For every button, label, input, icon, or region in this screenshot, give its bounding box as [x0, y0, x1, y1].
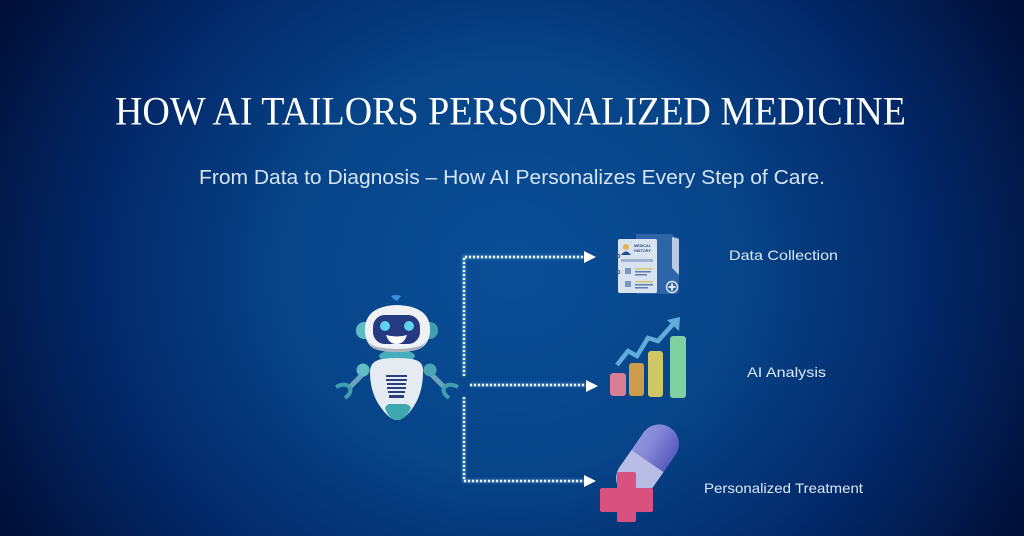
bar yellow: [648, 351, 663, 397]
icon: robot: [336, 295, 458, 420]
doc avatar: [623, 244, 629, 250]
bar pink: [610, 373, 626, 396]
capsule upper half: [632, 424, 679, 472]
icon: capsule with cross: [600, 424, 679, 522]
robot antenna: [391, 295, 401, 301]
subtitle: From Data to Diagnosis – How AI Personalizes Every Step of Care.: [199, 167, 825, 189]
trend arrow: [617, 323, 674, 365]
label: personalized treatment: Personalized Treatment: [704, 480, 863, 496]
capsule lower half: [616, 450, 664, 498]
document sheet: [618, 239, 657, 293]
folder back: [636, 234, 679, 294]
medical cross: [600, 472, 653, 522]
doc heading second line: HISTORY: [634, 248, 651, 253]
robot ears: [356, 322, 374, 339]
robot arms: [350, 375, 444, 387]
doc rings: [616, 254, 620, 258]
icon: medical history folder: [616, 234, 679, 294]
title: HOW AI TAILORS PERSONALIZED MEDICINE: [115, 88, 906, 134]
robot neck: [379, 350, 415, 362]
label: ai analysis: AI Analysis: [747, 364, 826, 380]
folder cross badge: [666, 282, 678, 292]
robot body: [370, 358, 423, 420]
flow connector arrows: [464, 251, 598, 487]
bar orange: [629, 363, 644, 396]
robot head: [365, 305, 430, 352]
label: data collection: Data Collection: [729, 247, 838, 263]
bar green: [670, 336, 686, 398]
robot chest vents: [386, 375, 407, 398]
robot claws: [336, 385, 458, 398]
robot face screen: [373, 315, 420, 344]
icon: growth bar chart: [610, 317, 686, 398]
doc lines: [621, 259, 653, 262]
robot belly tip: [385, 404, 411, 420]
doc heading: MEDICAL: [634, 243, 652, 248]
